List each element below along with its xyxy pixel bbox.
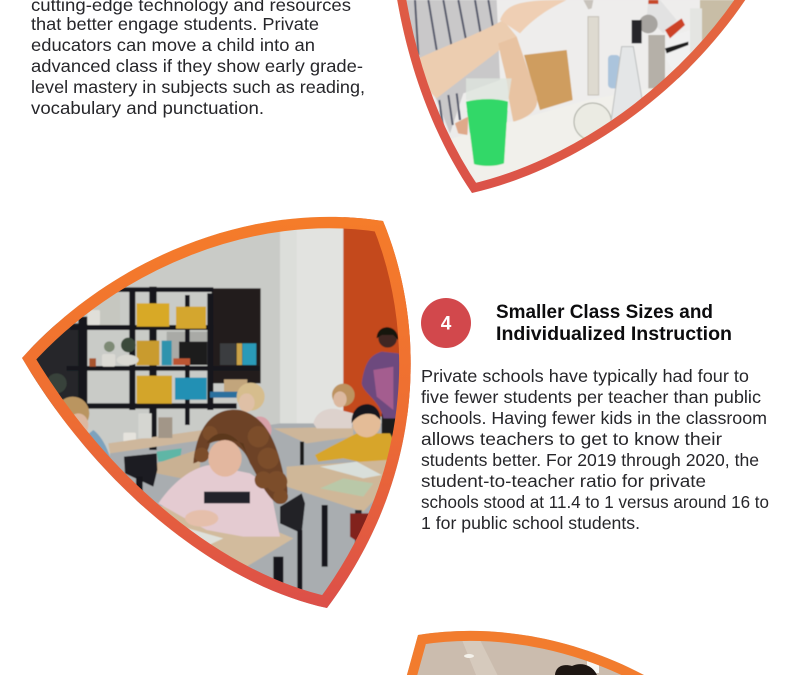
apron	[400, 0, 500, 133]
text block: reason 4 body copy: schools stood at 11.4 to 1 versus around 16 to	[421, 492, 769, 512]
main student	[158, 410, 288, 537]
text block: reason 4 body copy: student-to-teacher ratio for private	[421, 471, 706, 491]
conical flask	[610, 46, 643, 120]
photo panel: science lab with green beaker	[397, 0, 746, 193]
heading: smaller class sizes: Individualized Instruction	[496, 323, 732, 345]
text block: reason 3 body copy: level mastery in subjects such as reading,	[31, 77, 365, 97]
text block: reason 4 body copy: 1 for public school students.	[421, 513, 640, 533]
plants and pots	[47, 310, 139, 444]
chairs	[124, 453, 157, 487]
front desk	[145, 506, 293, 566]
yellow shirt boy	[314, 404, 392, 462]
photo panel: next section image, cropped at page edge	[407, 630, 644, 675]
green beaker	[466, 78, 512, 100]
dark left area	[30, 322, 80, 410]
back desks	[273, 427, 353, 443]
table	[469, 122, 508, 167]
far blonde girl	[313, 384, 355, 428]
left boy	[56, 397, 117, 487]
right dark shelf	[212, 288, 261, 383]
chair	[524, 50, 573, 110]
lower shelf	[108, 430, 203, 453]
microscope	[647, 0, 677, 33]
text block: reason 4 body copy: allows teachers to get to know their	[421, 429, 722, 449]
number badge: 4: 4	[441, 314, 452, 334]
number badge: 4	[421, 298, 471, 348]
shelf frame	[67, 287, 260, 450]
text block: reason 4 body copy: Private schools have typically had four to	[421, 366, 749, 386]
round flask	[588, 17, 599, 95]
heading: smaller class sizes: Smaller Class Sizes and	[496, 301, 713, 323]
blonde student	[237, 383, 272, 440]
text block: reason 3 body copy: advanced class if they show early grade-	[31, 56, 363, 76]
text block: reason 4 body copy: five fewer students per teacher than public	[421, 387, 761, 407]
yellow and blue boxes	[137, 303, 256, 404]
teacher	[362, 327, 403, 440]
floor	[110, 423, 404, 606]
heading: smaller class sizes	[496, 301, 732, 345]
text block: reason 4 body copy: students better. For 2019 through 2020, the	[421, 450, 759, 470]
text block: reason 3 body copy: educators can move a child into an	[31, 35, 315, 55]
text block: reason 3 body copy: vocabulary and punctuation.	[31, 98, 264, 118]
text block: reason 4 body copy	[421, 366, 769, 533]
photo panel: classroom with students reading	[22, 216, 411, 608]
arm	[415, 20, 517, 98]
text block: reason 4 body copy: schools. Having fewer kids in the classroom	[421, 408, 767, 428]
text block: reason 3 body copy	[31, 0, 365, 118]
right desk	[287, 460, 387, 512]
text block: reason 3 body copy: that better engage students. Private	[31, 14, 319, 34]
